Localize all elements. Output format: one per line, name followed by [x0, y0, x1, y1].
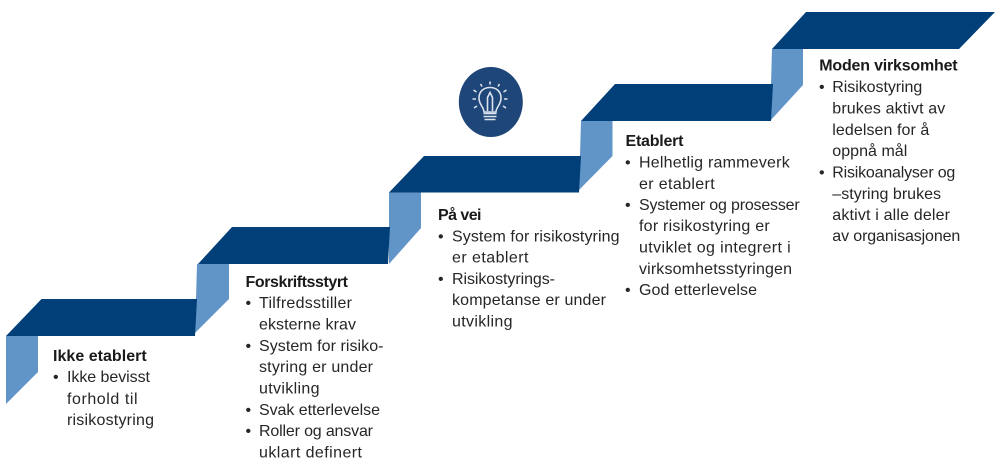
- text block: Etablert: •: [625, 282, 631, 299]
- text block: Etablert: er etablert: [639, 176, 715, 193]
- text block: Etablert: [625, 133, 800, 299]
- step 3 riser: [389, 192, 421, 264]
- text block: Etablert: for risikostyring er: [639, 218, 770, 235]
- text block: Moden virksomhet: •: [819, 79, 825, 96]
- text block: Etablert: Helhetlig rammeverk: [639, 154, 791, 172]
- text block: Forskriftsstyrt: •: [246, 338, 251, 355]
- text block: Moden virksomhet: aktivt i alle deler: [832, 207, 951, 224]
- text block: Etablert: God etterlevelse: [639, 282, 757, 299]
- text block: Etablert: utviklet og integrert i: [639, 240, 791, 256]
- text block: Forskriftsstyrt: System for risiko-: [259, 338, 384, 355]
- text block: På vei: Risikostyrings-: [452, 271, 555, 288]
- text block: Forskriftsstyrt: styring er under: [259, 359, 374, 376]
- text block: Forskriftsstyrt: Roller og ansvar: [259, 423, 374, 440]
- text block: Ikke etablert: [53, 348, 154, 429]
- text block: På vei: •: [438, 228, 444, 246]
- text block: Etablert: Etablert: [626, 133, 684, 150]
- text block: Moden virksomhet: Risikoanalyser og: [832, 164, 955, 182]
- step 1 riser: [6, 336, 38, 404]
- text block: På vei: kompetanse er under: [452, 292, 607, 309]
- text block: Ikke etablert: forhold til: [67, 391, 138, 408]
- text block: Moden virksomhet: brukes aktivt av: [832, 100, 945, 118]
- text block: Forskriftsstyrt: utvikling: [259, 380, 320, 398]
- text block: Etablert: •: [625, 197, 631, 214]
- step 5 tread: [772, 12, 995, 49]
- text block: Ikke etablert: Ikke etablert: [53, 348, 147, 365]
- text block: Moden virksomhet: oppnå mål: [832, 142, 907, 160]
- text block: Etablert: •: [625, 154, 631, 172]
- text block: Forskriftsstyrt: Svak etterlevelse: [259, 402, 380, 419]
- step 3 tread: [389, 156, 581, 192]
- text block: På vei: utvikling: [452, 314, 512, 330]
- text block: Forskriftsstyrt: Forskriftsstyrt: [246, 274, 349, 291]
- text block: På vei: [438, 206, 620, 330]
- text block: På vei: På vei: [438, 206, 482, 224]
- text block: Forskriftsstyrt: •: [246, 423, 251, 440]
- text block: Moden virksomhet: ledelsen for å: [832, 121, 929, 139]
- text block: På vei: •: [438, 271, 444, 288]
- text block: På vei: er etablert: [452, 250, 529, 266]
- step 4 tread: [581, 84, 773, 121]
- step 2 riser: [195, 264, 229, 333]
- text block: Forskriftsstyrt: •: [246, 295, 251, 312]
- text block: Moden virksomhet: Risikostyring: [832, 79, 922, 96]
- text block: Ikke etablert: risikostyring: [67, 412, 154, 429]
- text block: Forskriftsstyrt: [246, 274, 384, 462]
- text block: Moden virksomhet: [819, 58, 960, 245]
- text block: Etablert: virksomhetsstyringen: [639, 261, 792, 278]
- text block: På vei: System for risikostyring: [452, 228, 620, 246]
- step 5 riser: [770, 49, 803, 121]
- text block: Moden virksomhet: av organisasjonen: [832, 228, 960, 245]
- text block: Moden virksomhet: –styring brukes: [832, 186, 941, 203]
- text block: Ikke etablert: Ikke bevisst: [67, 369, 151, 386]
- icon: lightbulb with pencil: [459, 67, 523, 137]
- text block: Ikke etablert: •: [53, 369, 59, 386]
- text block: Forskriftsstyrt: eksterne krav: [259, 316, 356, 334]
- step 1 tread: [6, 299, 197, 336]
- step 2 tread: [198, 227, 390, 264]
- text block: Etablert: Systemer og prosesser: [639, 197, 800, 214]
- text block: Moden virksomhet: •: [819, 164, 825, 182]
- text block: Forskriftsstyrt: uklart definert: [259, 444, 363, 462]
- step 4 riser: [579, 121, 612, 190]
- text block: Forskriftsstyrt: Tilfredsstiller: [259, 295, 353, 312]
- text block: Forskriftsstyrt: •: [246, 402, 251, 419]
- text block: Moden virksomhet: Moden virksomhet: [819, 58, 958, 74]
